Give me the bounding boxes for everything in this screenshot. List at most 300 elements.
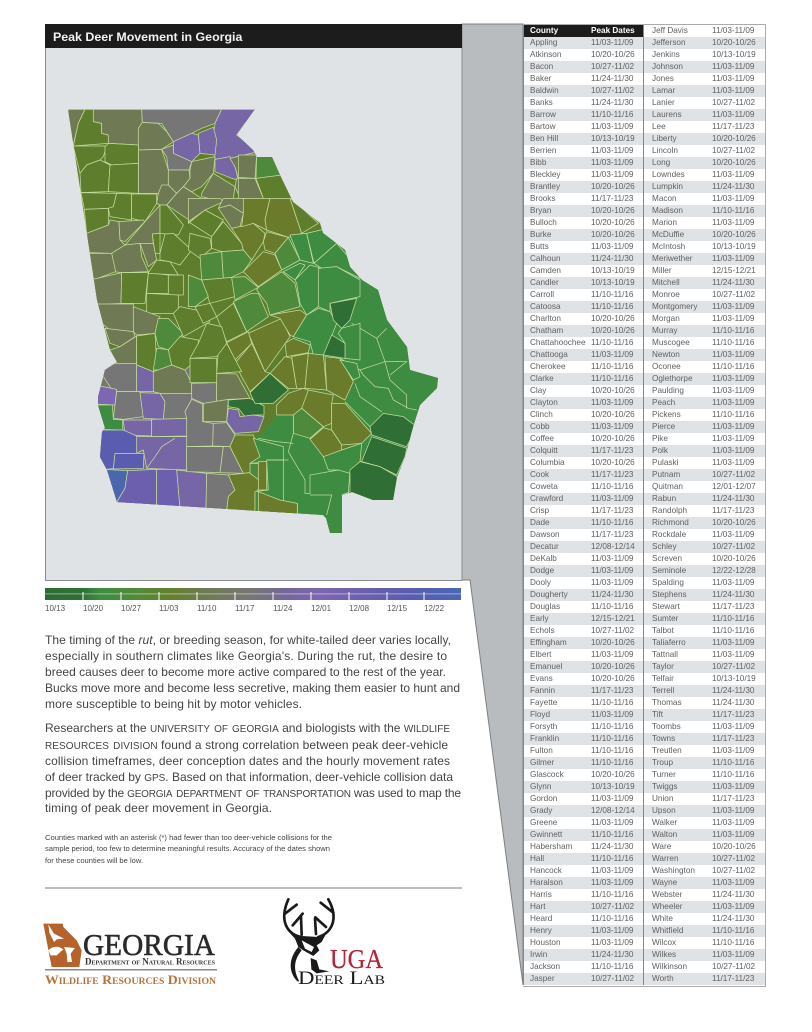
county table: Tattnall (652, 650, 678, 659)
county table: 10/27-11/02 (591, 62, 634, 71)
county table: 11/03-11/09 (591, 422, 634, 431)
county table: Hall (530, 854, 544, 863)
county table: Lumpkin (652, 182, 683, 191)
county table: 10/27-11/02 (591, 974, 634, 983)
county table: 11/10-11/16 (712, 926, 754, 935)
county table: Elbert (530, 650, 551, 659)
county table: Candler (530, 278, 559, 287)
county table: Jeff Davis (652, 26, 688, 35)
text block: research method: Researchers at the university of georgia and biologists with the wildlife (45, 720, 450, 736)
county table: 11/03-11/09 (591, 38, 634, 47)
county table: 11/17-11/23 (591, 506, 634, 515)
county table: Clayton (530, 398, 558, 407)
county table: McDuffie (652, 230, 684, 239)
county table: Rabun (652, 494, 676, 503)
county table: 11/03-11/09 (591, 650, 634, 659)
county table: 10/27-11/02 (712, 962, 755, 971)
county table: Long (652, 158, 670, 167)
counties: north and west Georgia (65, 109, 258, 313)
county table: Douglas (530, 602, 560, 611)
county table: Ware (652, 842, 671, 851)
county table: 11/17-11/23 (712, 122, 754, 131)
county table: 11/24-11/30 (712, 278, 754, 287)
county table: Oconee (652, 362, 681, 371)
legend: colour ramp by week: 12/08 (349, 604, 370, 613)
legend: colour ramp by week: 11/03 (159, 604, 179, 613)
county table: 10/20-10/26 (591, 434, 635, 443)
county table: Gwinnett (530, 830, 562, 839)
county table: 11/03-11/09 (712, 458, 754, 467)
county table: Coffee (530, 434, 554, 443)
county table: 11/17-11/23 (712, 734, 754, 743)
county table: Colquitt (530, 446, 558, 455)
county table: 11/10-11/16 (712, 614, 754, 623)
county table: 11/03-11/09 (712, 530, 754, 539)
county table: 10/20-10/26 (591, 314, 635, 323)
county table: 11/03-11/09 (712, 194, 754, 203)
county table: 11/03-11/09 (712, 422, 754, 431)
county table: Monroe (652, 290, 680, 299)
county table: Pike (652, 434, 668, 443)
text block: research method: timing of peak deer movement in Georgia. (45, 801, 272, 815)
county table: 11/10-11/16 (591, 890, 634, 899)
county table: 11/24-11/30 (712, 686, 754, 695)
county table: 11/03-11/09 (712, 86, 754, 95)
county table: 11/17-11/23 (712, 602, 754, 611)
county table: Cook (530, 470, 549, 479)
county table: County (530, 26, 558, 35)
county table: Wayne (652, 878, 677, 887)
county table: 10/20-10/26 (591, 206, 635, 215)
county table: Taylor (652, 662, 674, 671)
county table: 11/10-11/16 (712, 626, 754, 635)
county table: 10/20-10/26 (712, 134, 756, 143)
county table: Schley (652, 542, 677, 551)
county table: 11/24-11/30 (712, 182, 754, 191)
counties: northeast coast (238, 155, 295, 203)
footnote: sample period, too few to determine meaningful results. Accuracy of the dates shown (45, 844, 330, 853)
county table: 12/08-12/14 (591, 542, 635, 551)
county table: Bibb (530, 158, 546, 167)
county table: 11/17-11/23 (591, 530, 634, 539)
county table: 11/17-11/23 (712, 506, 754, 515)
county table: Clarke (530, 374, 554, 383)
county table: Montgomery (652, 302, 698, 311)
county table: 10/20-10/26 (712, 38, 756, 47)
county table: 11/10-11/16 (591, 722, 634, 731)
county table: 11/10-11/16 (712, 770, 754, 779)
county table: Wilcox (652, 938, 676, 947)
county table: Banks (530, 98, 553, 107)
county table: 11/03-11/09 (712, 746, 754, 755)
county table: 11/10-11/16 (712, 758, 754, 767)
county table: Lamar (652, 86, 675, 95)
county table: Pierce (652, 422, 675, 431)
text block: research method: of deer tracked by gps. Based on that information, deer-vehicle collision data (45, 769, 453, 785)
county table: 11/10-11/16 (591, 962, 634, 971)
county table: Walker (652, 818, 677, 827)
logo: Georgia DNR Wildlife Resources Division: GEORGIA (83, 927, 216, 962)
county table: 11/03-11/09 (712, 254, 754, 263)
county table: Echols (530, 626, 555, 635)
county table: Jefferson (652, 38, 686, 47)
county table: 11/03-11/09 (712, 818, 754, 827)
county table: Barrow (530, 110, 556, 119)
county table: 11/03-11/09 (712, 446, 754, 455)
county table: Muscogee (652, 338, 690, 347)
county table: 11/10-11/16 (712, 410, 754, 419)
county table: Berrien (530, 146, 556, 155)
county table: 11/03-11/09 (712, 638, 754, 647)
county table: 11/24-11/30 (591, 950, 634, 959)
county table: 11/10-11/16 (591, 830, 634, 839)
county table: 11/17-11/23 (591, 194, 634, 203)
county table: 11/03-11/09 (712, 302, 754, 311)
county table: Hart (530, 902, 545, 911)
county table: 11/10-11/16 (712, 362, 754, 371)
county table: 11/03-11/09 (712, 62, 754, 71)
county table: Polk (652, 446, 668, 455)
county table: Peak Dates (591, 26, 635, 35)
county table: 10/20-10/26 (591, 182, 635, 191)
text block: research method (45, 720, 461, 815)
county table: Fayette (530, 698, 557, 707)
legend: colour ramp by week: 12/22 (424, 604, 445, 613)
county table: 10/27-11/02 (712, 854, 755, 863)
logo: UGA Deer Lab (284, 899, 385, 989)
county table: 10/20-10/26 (591, 386, 635, 395)
county table: Dade (530, 518, 550, 527)
county table: Butts (530, 242, 549, 251)
map: Georgia counties by peak date (60, 100, 450, 540)
county table: White (652, 914, 673, 923)
county table: Forsyth (530, 722, 557, 731)
county table: 11/03-11/09 (591, 554, 634, 563)
county table: 10/13-10/19 (591, 134, 635, 143)
title (45, 24, 462, 48)
county table: 11/10-11/16 (591, 746, 634, 755)
county table: Jackson (530, 962, 560, 971)
county table: 11/03-11/09 (591, 242, 634, 251)
county table: 11/17-11/23 (712, 794, 754, 803)
county table: Quitman (652, 482, 683, 491)
county table: 10/20-10/26 (591, 662, 635, 671)
counties: central Georgia (188, 198, 360, 403)
legend: colour ramp by week: 10/20 (83, 604, 104, 613)
county table: Habersham (530, 842, 572, 851)
county table: Tift (652, 710, 663, 719)
county table: Clinch (530, 410, 553, 419)
county table: Dougherty (530, 590, 568, 599)
text block: the rut: especially in southern climates like Georgia’s. During the rut, the desire to (45, 649, 447, 663)
county table: 10/13-10/19 (591, 782, 635, 791)
county table: 11/03-11/09 (712, 878, 754, 887)
county table: 11/10-11/16 (591, 854, 634, 863)
county table: 11/03-11/09 (591, 350, 634, 359)
county table: 12/08-12/14 (591, 806, 635, 815)
text block: the rut: breed causes deer to become more active compared to the rest of the year. (45, 665, 446, 679)
county table: 10/20-10/26 (591, 638, 635, 647)
county table: Burke (530, 230, 551, 239)
logo: Georgia DNR Wildlife Resources Division: Department of Natural Resources (85, 956, 216, 966)
county table: Brooks (530, 194, 555, 203)
counties: southeast Georgia (258, 323, 417, 515)
county table: Oglethorpe (652, 374, 693, 383)
county table: 11/17-11/23 (591, 470, 634, 479)
legend: colour ramp by week: 10/27 (121, 604, 142, 613)
connector band to county table (462, 24, 523, 985)
county table: 11/10-11/16 (712, 938, 754, 947)
county table: Fannin (530, 686, 555, 695)
legend: colour ramp by week: 11/24 (273, 604, 293, 613)
county table: 11/03-11/09 (591, 566, 634, 575)
county table: 11/03-11/09 (712, 902, 754, 911)
county table: Washington (652, 866, 695, 875)
county table: Camden (530, 266, 561, 275)
county table: Chatham (530, 326, 563, 335)
county table: Bartow (530, 122, 555, 131)
county table: DeKalb (530, 554, 557, 563)
legend: colour ramp by week: 11/10 (197, 604, 217, 613)
county table: Johnson (652, 62, 683, 71)
county table: Bleckley (530, 170, 560, 179)
county table: Randolph (652, 506, 687, 515)
county table: Lincoln (652, 146, 678, 155)
text block: the rut: The timing of the rut, or breeding season, for white-tailed deer varies locally, (45, 633, 451, 647)
logo: UGA Deer Lab: UGA (330, 944, 383, 974)
county table: 12/22-12/28 (712, 566, 756, 575)
county table: Cherokee (530, 362, 566, 371)
text block: the rut (45, 633, 460, 711)
county table: Morgan (652, 314, 680, 323)
county table: 11/24-11/30 (712, 890, 754, 899)
county table: Gilmer (530, 758, 554, 767)
county table: 10/13-10/19 (712, 242, 756, 251)
county table: Baker (530, 74, 551, 83)
text block: research method: provided by the georgia department of transportation was used to map the (45, 785, 461, 801)
county table (523, 24, 766, 987)
county table: 11/03-11/09 (712, 218, 754, 227)
county table: 11/03-11/09 (591, 794, 634, 803)
county table: Jenkins (652, 50, 680, 59)
county table: Lee (652, 122, 666, 131)
county table: 10/20-10/26 (712, 158, 756, 167)
county table: 10/20-10/26 (591, 230, 635, 239)
county table: Turner (652, 770, 676, 779)
county table: Peach (652, 398, 675, 407)
logo: Georgia DNR Wildlife Resources Division: Wildlife Resources Division (45, 973, 217, 987)
county table: Crawford (530, 494, 563, 503)
county table: Stephens (652, 590, 687, 599)
text block: research method: resources division found a strong correlation between peak deer-vehicle (45, 737, 448, 753)
county table: Irwin (530, 950, 547, 959)
county table: 11/03-11/09 (712, 350, 754, 359)
legend: colour ramp by week: 11/17 (235, 604, 255, 613)
county table: 10/20-10/26 (712, 518, 756, 527)
county table: Franklin (530, 734, 559, 743)
county table: Terrell (652, 686, 674, 695)
county table: 11/10-11/16 (712, 338, 754, 347)
county table: Gordon (530, 794, 557, 803)
county table: 11/10-11/16 (591, 338, 634, 347)
county table: 11/24-11/30 (712, 914, 754, 923)
county table: 11/03-11/09 (712, 434, 754, 443)
county table: 11/24-11/30 (591, 254, 634, 263)
county table: Early (530, 614, 549, 623)
county table: 11/03-11/09 (712, 806, 754, 815)
text block: the rut: Bucks move more and become less secretive, making them easier to hunt and (45, 681, 460, 695)
county table: 10/27-11/02 (712, 470, 755, 479)
county table: 11/03-11/09 (712, 650, 754, 659)
county table: Brantley (530, 182, 560, 191)
county table: Walton (652, 830, 677, 839)
county table: Effingham (530, 638, 567, 647)
county table: 10/13-10/19 (591, 266, 635, 275)
county table: 10/27-11/02 (712, 662, 755, 671)
county table: Upson (652, 806, 676, 815)
county table: 12/15-12/21 (712, 266, 756, 275)
county table: Dawson (530, 530, 560, 539)
county table: 11/17-11/23 (712, 974, 754, 983)
county table: Union (652, 794, 673, 803)
footnote: for these counties will be low. (45, 856, 143, 865)
county table: 11/24-11/30 (591, 98, 634, 107)
county table: Webster (652, 890, 682, 899)
county table: Mitchell (652, 278, 680, 287)
county table: Paulding (652, 386, 684, 395)
county table: 11/10-11/16 (591, 482, 634, 491)
county table: 11/10-11/16 (591, 518, 634, 527)
county table: Madison (652, 206, 683, 215)
county table: Newton (652, 350, 680, 359)
county table: Toombs (652, 722, 681, 731)
county table: 11/03-11/09 (712, 386, 754, 395)
county table: McIntosh (652, 242, 685, 251)
county table: 11/24-11/30 (712, 590, 754, 599)
county table: Atkinson (530, 50, 561, 59)
county table: Clay (530, 386, 546, 395)
county table: 10/20-10/26 (712, 230, 756, 239)
county table: Towns (652, 734, 675, 743)
county table: Chattahoochee (530, 338, 586, 347)
county table: Wilkes (652, 950, 676, 959)
legend: colour ramp by week: 10/13 (45, 604, 66, 613)
county table: Glynn (530, 782, 551, 791)
county table: Calhoun (530, 254, 560, 263)
county table: Cobb (530, 422, 550, 431)
county table: Ben Hill (530, 134, 558, 143)
county table: 11/24-11/30 (712, 494, 754, 503)
county table: Wheeler (652, 902, 682, 911)
county table: 11/10-11/16 (591, 602, 634, 611)
county table: Liberty (652, 134, 677, 143)
county table: Worth (652, 974, 674, 983)
county table: 11/03-11/09 (591, 938, 634, 947)
county table: 10/20-10/26 (712, 554, 756, 563)
county table: Twiggs (652, 782, 677, 791)
county table: 10/27-11/02 (712, 98, 755, 107)
legend: colour ramp by week: 12/01 (311, 604, 332, 613)
county table: Screven (652, 554, 682, 563)
county table: Bulloch (530, 218, 557, 227)
county table: 10/27-11/02 (591, 902, 634, 911)
county table: 11/03-11/09 (712, 110, 754, 119)
county table: Heard (530, 914, 552, 923)
county table: 10/20-10/26 (591, 410, 635, 419)
county table: Richmond (652, 518, 689, 527)
county table: 11/03-11/09 (591, 710, 634, 719)
county table: 11/03-11/09 (712, 74, 754, 83)
county table: Baldwin (530, 86, 559, 95)
county table: Henry (530, 926, 552, 935)
county table: Thomas (652, 698, 682, 707)
county table: 11/03-11/09 (591, 578, 634, 587)
county table: Telfair (652, 674, 674, 683)
county table: Decatur (530, 542, 559, 551)
county table: Troup (652, 758, 673, 767)
county table: 11/10-11/16 (591, 698, 634, 707)
county table: 10/13-10/19 (712, 50, 756, 59)
county table: 11/03-11/09 (591, 398, 634, 407)
county table: 10/20-10/26 (591, 50, 635, 59)
county table: Bacon (530, 62, 553, 71)
county table: Seminole (652, 566, 686, 575)
county table: 11/03-11/09 (712, 26, 754, 35)
county table: 11/03-11/09 (591, 818, 634, 827)
county table: Hancock (530, 866, 562, 875)
panel: map background (46, 24, 462, 580)
logo: Georgia DNR Wildlife Resources Division (43, 924, 217, 987)
county table: 11/03-11/09 (712, 314, 754, 323)
county table: Stewart (652, 602, 680, 611)
county table: Marion (652, 218, 677, 227)
county table: 10/20-10/26 (591, 218, 635, 227)
text block: research method: collision timeframes, deer conception dates and the hourly movement rates (45, 754, 450, 768)
county table: 11/10-11/16 (591, 290, 634, 299)
county table: 11/03-11/09 (712, 170, 754, 179)
logo: UGA Deer Lab: Deer Lab (298, 968, 385, 989)
county table: 11/03-11/09 (712, 782, 754, 791)
county table: 11/03-11/09 (591, 866, 634, 875)
county table: Sumter (652, 614, 678, 623)
county table: 10/27-11/02 (712, 146, 755, 155)
county table: Bryan (530, 206, 551, 215)
county table: 11/03-11/09 (591, 494, 634, 503)
county table: 11/03-11/09 (591, 158, 634, 167)
county table: Treutlen (652, 746, 682, 755)
county table: 12/01-12/07 (712, 482, 756, 491)
county table: Catoosa (530, 302, 560, 311)
county table: Columbia (530, 458, 565, 467)
county table: 11/10-11/16 (712, 326, 754, 335)
county table: Pickens (652, 410, 681, 419)
county table: Meriwether (652, 254, 692, 263)
county table: Harris (530, 890, 552, 899)
county table: 10/20-10/26 (591, 770, 635, 779)
county table: 11/03-11/09 (712, 578, 754, 587)
county table: Macon (652, 194, 677, 203)
icon: deer head with antlers (284, 899, 334, 981)
county table: 11/24-11/30 (591, 74, 634, 83)
county table: 12/15-12/21 (591, 614, 635, 623)
legend: colour ramp by week: 12/15 (387, 604, 408, 613)
county table: Evans (530, 674, 553, 683)
county table: Murray (652, 326, 677, 335)
icon: Georgia state with wildlife (43, 924, 82, 967)
county table: 10/20-10/26 (712, 842, 756, 851)
county table: Fulton (530, 746, 553, 755)
county table: 10/27-11/02 (591, 86, 634, 95)
